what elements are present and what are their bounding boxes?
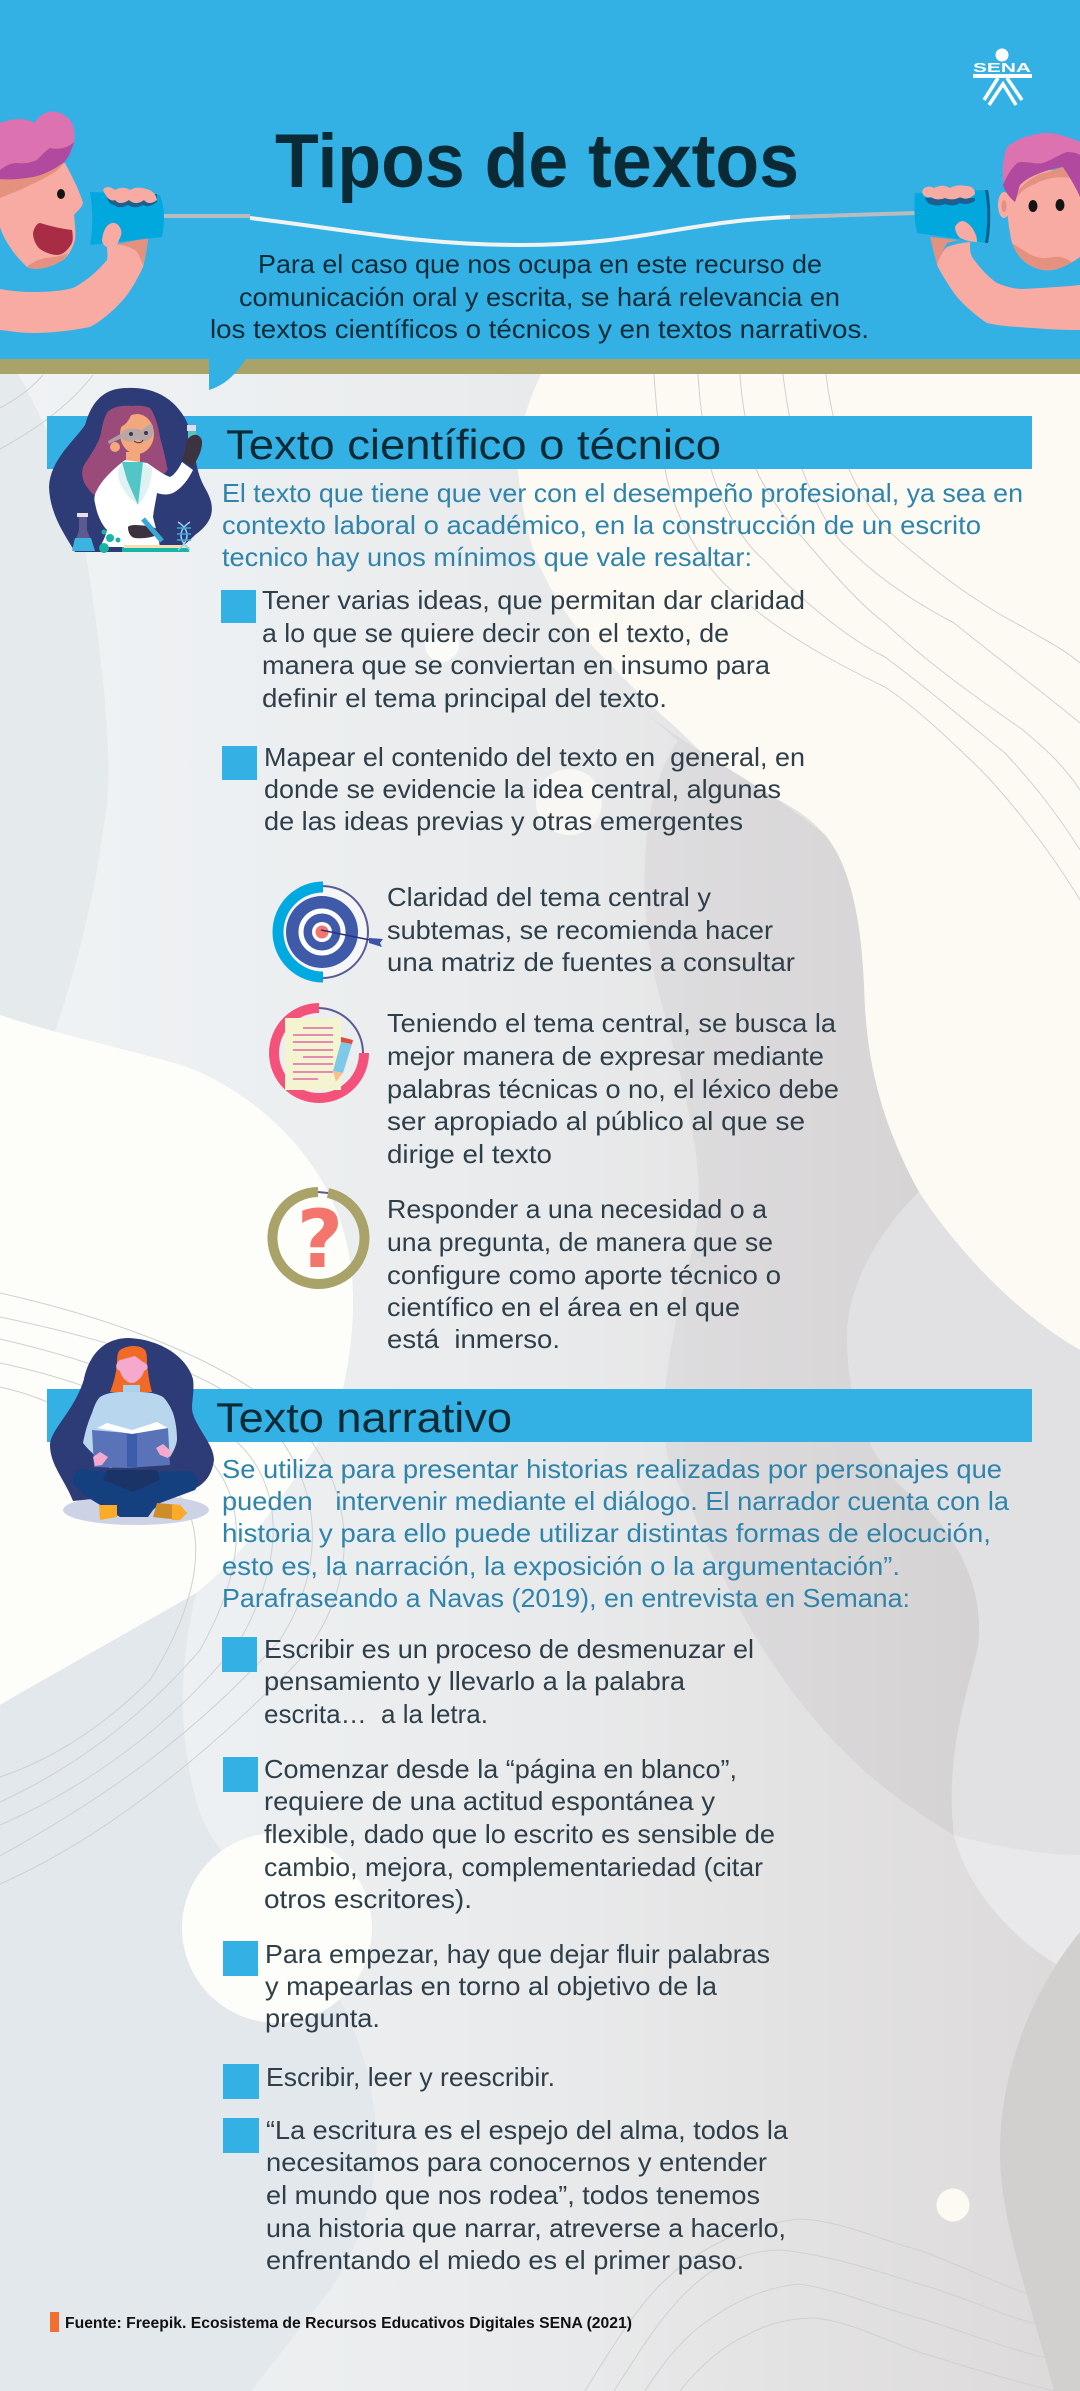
- text: teniendo: [387, 1008, 839, 1169]
- bullet 5: y mapearlas en torno al objetivo de la: [265, 1971, 718, 2001]
- text: claridad: subtemas, se recomienda hacer: [387, 915, 773, 945]
- text: teniendo: ser apropiado al público al que se: [387, 1106, 805, 1136]
- intro text: [210, 249, 869, 344]
- bullet 4: cambio, mejora, complementariedad (citar: [264, 1852, 763, 1882]
- bullet 7: necesitamos para conocernos y entender: [266, 2147, 767, 2177]
- panel: section bar científico: [47, 416, 1032, 469]
- bullet 4: otros escritores).: [264, 1884, 472, 1914]
- text: responder: [387, 1194, 781, 1354]
- intro text: Para el caso que nos ocupa en este recurso de: [258, 249, 822, 279]
- bullet 2: donde se evidencie la idea central, algunas: [264, 774, 781, 804]
- paragraph: narrativo intro: pueden intervenir mediante el diálogo. El narrador cuenta con la: [222, 1486, 1010, 1516]
- intro text: los textos científicos o técnicos y en textos narrativos.: [210, 314, 869, 344]
- text: teniendo: Teniendo el tema central, se busca la: [387, 1008, 837, 1038]
- bullet 5: pregunta.: [265, 2003, 380, 2033]
- bullet 5: Para empezar, hay que dejar fluir palabras: [265, 1939, 770, 1969]
- bullet 4: [223, 1754, 775, 1914]
- bullet 1: definir el tema principal del texto.: [262, 683, 667, 713]
- logo: SENA: [973, 48, 1032, 105]
- text: responder: una pregunta, de manera que se: [387, 1227, 773, 1257]
- text: responder: configure como aporte técnico o: [387, 1260, 781, 1290]
- bullet 3: Escribir es un proceso de desmenuzar el: [264, 1634, 754, 1664]
- paragraph: científico intro: [222, 478, 1023, 572]
- paragraph: narrativo intro: [222, 1454, 1010, 1613]
- bullet 4: flexible, dado que lo escrito es sensible de: [264, 1819, 775, 1849]
- bullet 7: [223, 2115, 789, 2275]
- bullet 1: a lo que se quiere decir con el texto, de: [262, 618, 729, 648]
- logo: SENA: SENA: [973, 61, 1031, 75]
- paragraph: narrativo intro: esto es, la narración, la exposición o la argumentación”.: [222, 1551, 900, 1581]
- bullet 3: pensamiento y llevarlo a la palabra: [264, 1666, 686, 1696]
- heading: texto narrativo: Texto narrativo: [216, 1394, 512, 1441]
- text: responder: está inmerso.: [387, 1324, 560, 1354]
- text: claridad: [387, 882, 795, 977]
- source footer: Fuente: Freepik. Ecosistema de Recursos Educativos Digitales SENA (2021): [65, 2315, 632, 2332]
- bullet 4: Comenzar desde la “página en blanco”,: [264, 1754, 737, 1784]
- bullet 7: enfrentando el miedo es el primer paso.: [266, 2245, 744, 2275]
- bullet 3: [222, 1634, 754, 1729]
- bullet 7: una historia que narrar, atreverse a hacerlo,: [266, 2213, 786, 2243]
- bullet 1: Tener varias ideas, que permitan dar claridad: [262, 585, 805, 615]
- icon: document and pencil: [273, 1008, 364, 1098]
- icon: target: [276, 886, 383, 978]
- text: claridad: una matriz de fuentes a consultar: [387, 947, 795, 977]
- icon: question mark: [272, 1192, 364, 1286]
- text: teniendo: dirige el texto: [387, 1139, 552, 1169]
- icon: person reading: [50, 1338, 214, 1525]
- icon: string between cans: [163, 213, 915, 245]
- icon: left character: [0, 111, 164, 333]
- bullet 2: [222, 742, 805, 836]
- text: teniendo: palabras técnicas o no, el léxico debe: [387, 1074, 839, 1104]
- title: Tipos de textos: [275, 119, 799, 204]
- bullet 6: Escribir, leer y reescribir.: [266, 2062, 555, 2092]
- icon: right character: [914, 133, 1080, 330]
- icon: scientist: [49, 388, 212, 553]
- icon: question mark: ?: [297, 1193, 343, 1286]
- intro text: comunicación oral y escrita, se hará relevancia en: [239, 282, 840, 312]
- bullet 1: manera que se conviertan en insumo para: [262, 650, 771, 680]
- bullet 5: [223, 1939, 770, 2033]
- paragraph: científico intro: El texto que tiene que ver con el desempeño profesional, ya sea en: [222, 478, 1023, 508]
- bullet 6: [223, 2062, 555, 2099]
- paragraph: científico intro: tecnico hay unos mínimos que vale resaltar:: [222, 542, 752, 572]
- paragraph: narrativo intro: Se utiliza para presentar historias realizadas por personajes que: [222, 1454, 1002, 1484]
- bullet 1: [221, 585, 805, 713]
- paragraph: narrativo intro: historia y para ello puede utilizar distintas formas de elocución,: [222, 1518, 991, 1548]
- bullet 3: escrita… a la letra.: [264, 1699, 488, 1729]
- text: teniendo: mejor manera de expresar mediante: [387, 1041, 824, 1071]
- text: responder: científico en el área en el que: [387, 1292, 740, 1322]
- paragraph: narrativo intro: Parafraseando a Navas (2019), en entrevista en Semana:: [222, 1583, 910, 1613]
- heading: texto científico: Texto científico o técnico: [226, 421, 721, 468]
- bullet 4: requiere de una actitud espontánea y: [264, 1786, 715, 1816]
- text: claridad: Claridad del tema central y: [387, 882, 711, 912]
- bullet 7: el mundo que nos rodea”, todos tenemos: [266, 2180, 760, 2210]
- paragraph: científico intro: contexto laboral o académico, en la construcción de un escrito: [222, 510, 981, 540]
- text: responder: Responder a una necesidad o a: [387, 1194, 768, 1224]
- header band: [0, 0, 1080, 390]
- panel: section bar narrativo: [47, 1389, 1032, 1442]
- bullet 2: Mapear el contenido del texto en general, en: [264, 742, 805, 772]
- bullet 7: “La escritura es el espejo del alma, todos la: [266, 2115, 789, 2145]
- bullet 2: de las ideas previas y otras emergentes: [264, 806, 743, 836]
